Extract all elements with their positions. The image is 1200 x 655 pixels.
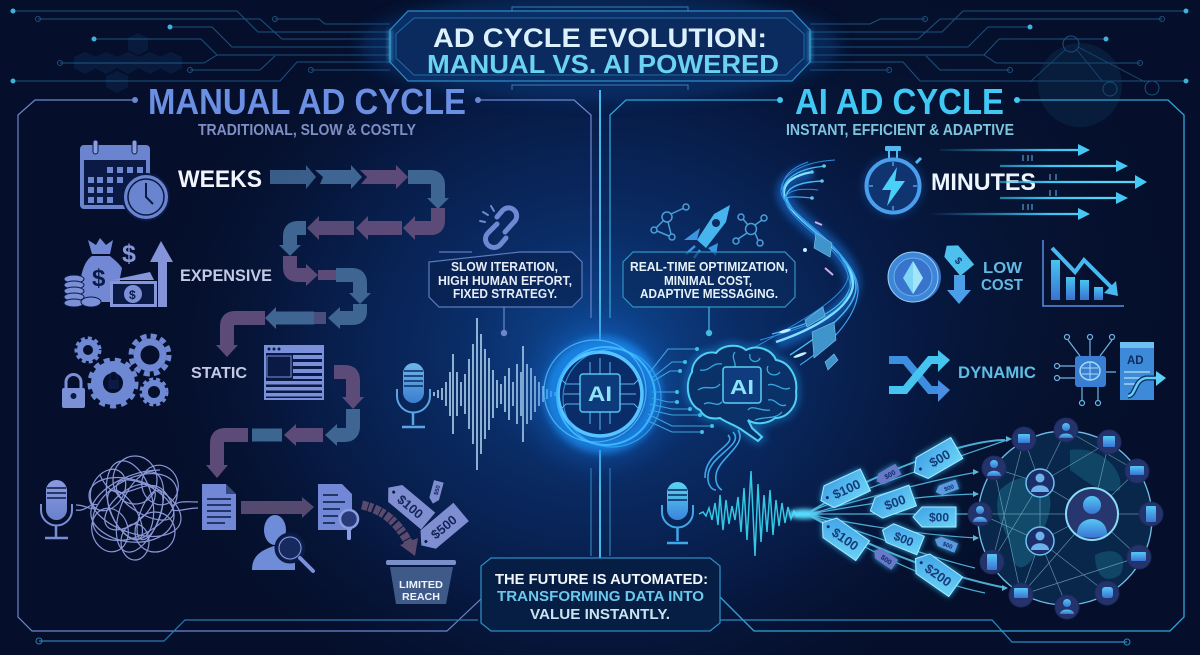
icon: microphone, ai input <box>662 482 693 543</box>
label: minutes: MINUTES <box>931 169 1036 196</box>
icon: money bag and rising cost: $ <box>122 240 136 268</box>
price tags: ai: $00 <box>879 554 893 567</box>
callout: ai summary: ADAPTIVE MESSAGING. <box>640 287 778 301</box>
waveform: ai input <box>699 471 820 556</box>
icon: reviewed document <box>318 484 358 540</box>
icon: money bag and rising cost: $ <box>129 288 136 302</box>
icon: coin, tag and down arrow <box>888 240 974 304</box>
callout: ai summary: REAL-TIME OPTIMIZATION, <box>630 260 788 274</box>
voice input wave, manual to AI <box>397 318 555 470</box>
price tags: manual: $50 <box>434 484 442 496</box>
AI core <box>505 299 695 489</box>
fan lines to audience <box>810 436 1012 593</box>
snake arrow path <box>206 165 449 478</box>
heading: manual ad cycle: MANUAL AD CYCLE <box>148 81 466 122</box>
price tags: ai: $100 <box>830 476 863 502</box>
callout: bottom conclusion: THE FUTURE IS AUTOMATED: <box>495 572 708 588</box>
AI brain <box>646 346 796 490</box>
icon: AI chip with adaptive ad <box>1054 334 1166 406</box>
callout: manual summary: HIGH HUMAN EFFORT, <box>438 274 572 288</box>
label: low cost: COST <box>981 277 1023 294</box>
panel: ai ad cycle <box>610 81 1184 631</box>
icon: broken chain link <box>480 206 517 247</box>
panel frame: ai <box>610 100 1184 631</box>
label: low cost <box>981 260 1023 294</box>
audience network globe <box>968 418 1163 619</box>
icon: person with magnifier <box>252 515 313 571</box>
icon: stopwatch <box>862 146 924 217</box>
subheading: manual: TRADITIONAL, SLOW & COSTLY <box>198 122 417 139</box>
price tags: ai: $00 <box>927 447 953 470</box>
label: low cost: LOW <box>983 260 1023 277</box>
chart: falling cost <box>1043 240 1124 306</box>
callout: ai summary: MINIMAL COST, <box>664 274 752 288</box>
callout: bottom conclusion: TRANSFORMING DATA INTO <box>497 589 704 605</box>
price tags: ai <box>816 438 963 597</box>
label: weeks: WEEKS <box>178 166 262 193</box>
price tags: ai: $00 <box>944 484 956 493</box>
price tags: manual: $500 <box>428 512 460 542</box>
callout: bottom conclusion: VALUE INSTANTLY. <box>530 607 670 623</box>
icon: coin, tag and down arrow: $ <box>952 256 964 267</box>
icon: shuffle arrows <box>889 350 950 402</box>
icon: calendar and clock <box>80 140 169 220</box>
label: static: STATIC <box>191 365 247 382</box>
price tags: manual <box>381 479 469 555</box>
icon: document <box>202 484 236 530</box>
AI brain: AI <box>730 377 754 399</box>
callout: manual summary: SLOW ITERATION, <box>451 260 558 274</box>
panel: manual ad cycle <box>18 81 591 631</box>
price tags: manual: $100 <box>394 492 426 522</box>
title: AD CYCLE EVOLUTION: <box>433 23 767 53</box>
label: expensive: EXPENSIVE <box>180 267 272 285</box>
icon: static web page <box>264 345 324 400</box>
title <box>360 0 840 101</box>
callout: bottom conclusion <box>481 558 720 631</box>
callout: manual summary: FIXED STRATEGY. <box>453 287 557 301</box>
arrow: pixelated into limited reach <box>362 505 418 556</box>
price tags: ai: $00 <box>892 529 916 550</box>
icon: money bag and rising cost <box>64 238 173 307</box>
icon: AI chip with adaptive ad: AD <box>1127 355 1144 367</box>
icon: tangled process <box>76 456 198 560</box>
callout: ai summary <box>623 252 795 336</box>
price tags: ai: $200 <box>922 561 954 590</box>
heading: ai ad cycle: AI AD CYCLE <box>795 81 1004 122</box>
price tags: ai: $100 <box>829 525 861 554</box>
icon: microphone, tangled input <box>41 480 72 538</box>
price tags: ai: $00 <box>884 469 897 481</box>
price tags: ai: $00 <box>882 492 908 513</box>
bucket: limited reach <box>386 560 456 604</box>
callout: manual summary <box>429 252 582 336</box>
bucket: limited reach: LIMITED <box>399 579 443 591</box>
price tags: ai: $00 <box>942 541 954 551</box>
panel frame: manual <box>18 100 591 631</box>
title: MANUAL VS. AI POWERED <box>427 49 779 79</box>
data stream ribbon <box>750 160 858 370</box>
arrow: document to review <box>241 497 314 518</box>
speed arrows <box>930 144 1147 220</box>
icon: gears and lock <box>62 336 169 408</box>
center divider <box>591 90 610 558</box>
icon: money bag and rising cost: $ <box>92 265 106 292</box>
label: dynamic: DYNAMIC <box>958 364 1036 382</box>
icon: rocket and network nodes <box>651 204 767 258</box>
AI core: AI <box>588 383 612 406</box>
bucket: limited reach: REACH <box>402 591 440 603</box>
subheading: ai: INSTANT, EFFICIENT & ADAPTIVE <box>786 122 1014 139</box>
price tags: ai: $00 <box>929 510 949 524</box>
